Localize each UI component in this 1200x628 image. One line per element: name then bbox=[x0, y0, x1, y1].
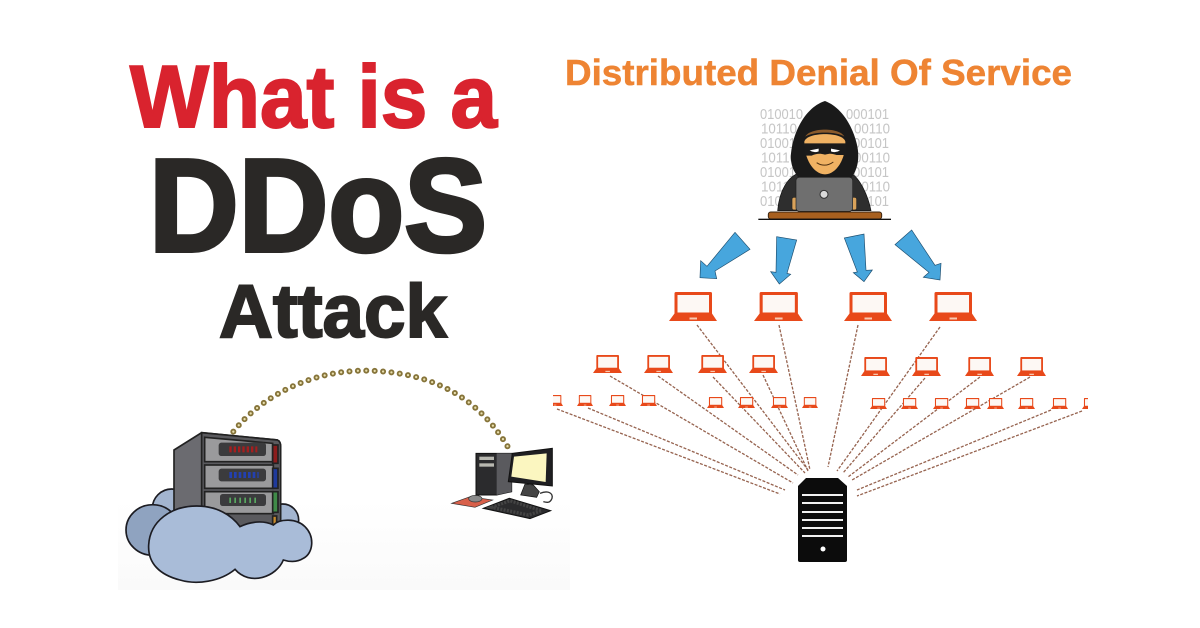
arrow 2 bbox=[771, 237, 797, 284]
front cloud bbox=[149, 506, 312, 582]
laptop bbox=[796, 177, 853, 211]
mouse pad bbox=[452, 497, 493, 507]
hood bbox=[791, 101, 858, 179]
server body bbox=[174, 433, 281, 530]
hacker at laptop bbox=[758, 101, 891, 220]
heading: Distributed Denial Of Service: Distributed Denial Of Service bbox=[565, 52, 1072, 93]
laptops: middle row bbox=[593, 355, 1046, 376]
binary code background: 01001 bbox=[760, 135, 796, 152]
target server bbox=[798, 478, 847, 562]
binary code background: 10110 bbox=[761, 150, 797, 166]
binary code background: 01001 bbox=[760, 164, 796, 181]
face bbox=[804, 134, 845, 174]
binary code background: 00110 bbox=[854, 120, 890, 138]
keyboard bbox=[483, 498, 551, 519]
server slots bbox=[219, 443, 266, 456]
tower bbox=[476, 453, 512, 495]
mask bbox=[804, 143, 846, 156]
binary code background: 1011 bbox=[761, 178, 790, 196]
binary code background: 00101 bbox=[853, 135, 889, 152]
desk bbox=[768, 212, 882, 219]
dashed connection lines bbox=[557, 325, 1082, 496]
binary code background: 000101 bbox=[846, 106, 889, 123]
hands bbox=[792, 197, 797, 210]
shoulders bbox=[778, 173, 871, 211]
binary code background: 10110 bbox=[761, 120, 797, 138]
arrow 1 bbox=[700, 232, 750, 279]
laptops: top row bbox=[669, 292, 977, 321]
server rack in cloud bbox=[126, 433, 312, 582]
back clouds bbox=[126, 489, 299, 555]
monitor bbox=[508, 448, 552, 486]
binary code background: 00101 bbox=[853, 164, 889, 181]
binary code background: 0100 bbox=[760, 193, 789, 210]
binary code background: 00101 bbox=[853, 193, 889, 210]
binary code background: 010010 bbox=[760, 106, 803, 123]
blue arrows bbox=[700, 230, 941, 284]
title: Attack: Attack bbox=[219, 269, 447, 353]
binary code background: 00110 bbox=[854, 178, 890, 196]
background fade: left scene bbox=[118, 500, 570, 590]
binary code background: 00110 bbox=[854, 150, 890, 166]
desktop computer bbox=[452, 448, 552, 519]
arrow 4 bbox=[895, 230, 941, 280]
title: What is a: What is a bbox=[130, 47, 498, 146]
binary code background bbox=[760, 106, 890, 210]
dotted connection arc bbox=[233, 371, 509, 449]
arrow 3 bbox=[844, 234, 872, 282]
title: DDoS: DDoS bbox=[149, 132, 487, 279]
laptops: bottom row bbox=[547, 395, 1099, 409]
